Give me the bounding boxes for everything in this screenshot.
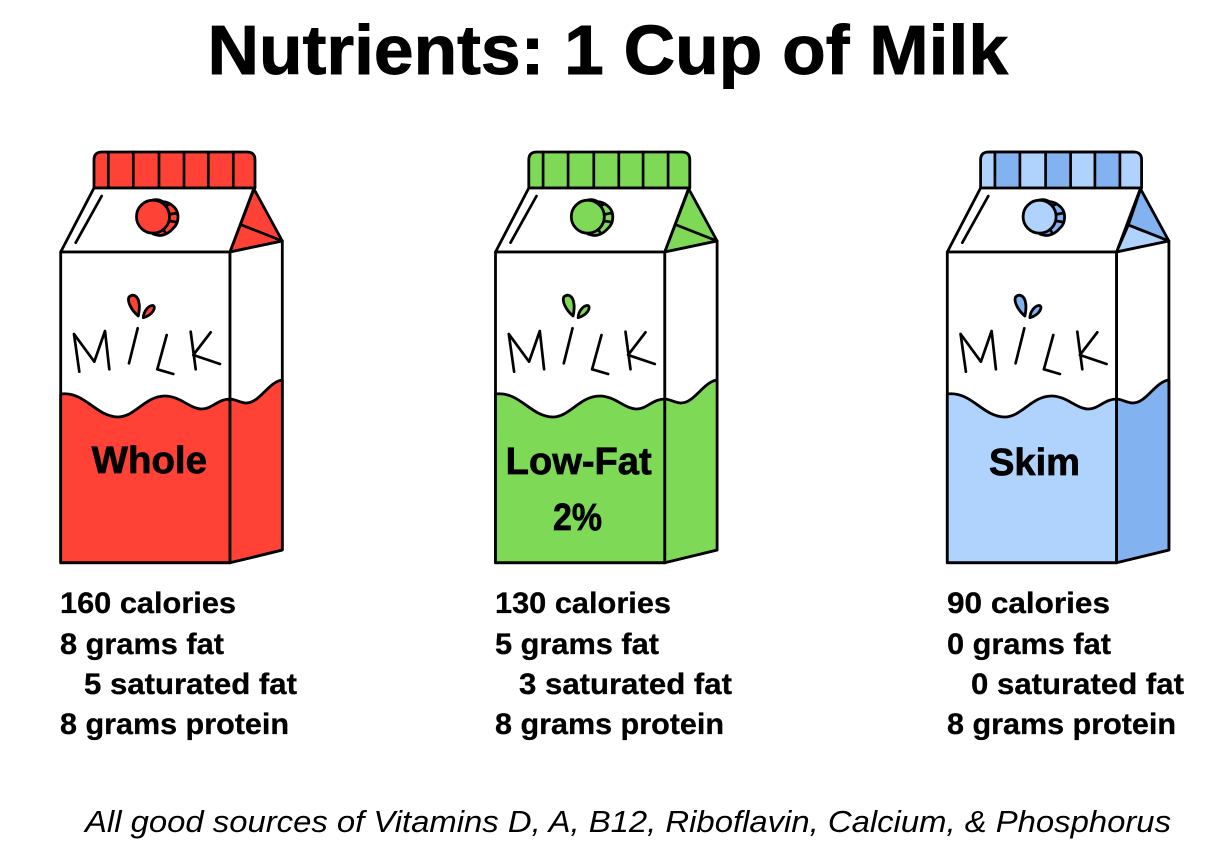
nutrient list: low-fat: 8 grams protein	[495, 708, 724, 741]
nutrient list: whole: 8 grams protein	[60, 708, 289, 741]
nutrient list: low-fat: 5 grams fat	[495, 628, 659, 661]
nutrient list: whole: 5 saturated fat	[84, 668, 297, 701]
nutrient list: skim: 8 grams protein	[947, 708, 1176, 741]
label: Low-Fat 2%: 2%	[553, 497, 602, 539]
panel: low-fat milk	[495, 152, 732, 741]
label: Skim: Skim	[989, 442, 1080, 484]
nutrient list: skim: 90 calories	[947, 587, 1110, 620]
nutrient list: skim: 0 saturated fat	[971, 668, 1184, 701]
icon: whole milk carton	[61, 152, 282, 563]
title: Nutrients: 1 Cup of Milk	[208, 11, 1008, 89]
nutrient list: whole: 8 grams fat	[60, 628, 224, 661]
nutrient list: skim	[947, 587, 1184, 741]
nutrient list: whole	[60, 587, 297, 741]
nutrient list: low-fat	[495, 587, 732, 741]
panel: whole milk	[60, 152, 297, 741]
nutrient list: skim: 0 grams fat	[947, 628, 1111, 661]
label: Whole: Whole	[92, 440, 207, 482]
nutrient list: low-fat: 3 saturated fat	[519, 668, 732, 701]
panel: skim milk	[947, 152, 1184, 741]
icon: low-fat milk carton	[496, 152, 717, 563]
label: Low-Fat 2%: Low-Fat	[506, 441, 652, 483]
label: Low-Fat 2%	[506, 441, 652, 539]
nutrient list: low-fat: 130 calories	[495, 587, 671, 620]
footnote: All good sources of Vitamins D, A, B12, Riboflavin, Calcium, & Phosphorus	[83, 804, 1171, 839]
icon: skim milk carton	[947, 152, 1169, 563]
nutrient list: whole: 160 calories	[60, 587, 236, 620]
